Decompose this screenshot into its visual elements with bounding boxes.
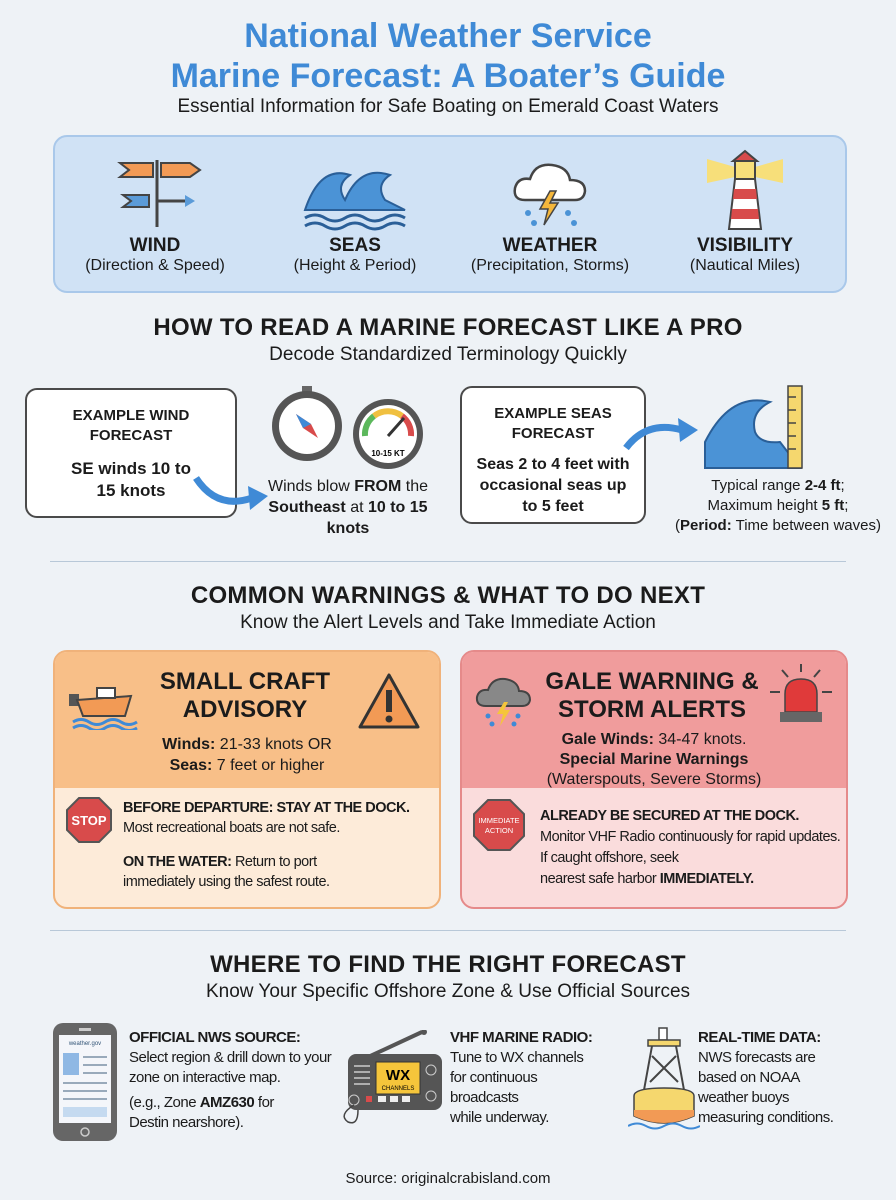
arrow: wind xyxy=(193,476,268,510)
icon: immediate action sign: IMMEDIATE xyxy=(478,816,520,825)
callout: seas forecast bubble: Seas 2 to 4 feet with occasional seas up to 5 feet xyxy=(477,456,629,515)
text: real-time data xyxy=(698,1029,833,1126)
arrow: seas xyxy=(623,418,698,450)
text: gale actions xyxy=(540,808,840,887)
heading: gale xyxy=(545,668,759,723)
icon: storm cloud xyxy=(513,164,586,226)
icon: waves xyxy=(304,172,406,230)
label: weather: (Precipitation, Storms) xyxy=(471,257,629,274)
text: VHF marine radio: while underway. xyxy=(450,1109,549,1126)
icon: immediate action sign: ACTION xyxy=(485,826,513,835)
label: visibility xyxy=(690,235,800,274)
label: wind: (Direction & Speed) xyxy=(85,257,225,274)
subheading: Know the Alert Levels and Take Immediate Action xyxy=(240,612,656,633)
text: VHF marine radio: for continuous xyxy=(450,1069,537,1086)
heading: small craft: ADVISORY xyxy=(183,696,307,723)
text: VHF marine radio: VHF MARINE RADIO: xyxy=(450,1029,592,1046)
panel: small craft advisory xyxy=(53,650,441,909)
footer: source: Source: originalcrabisland.com xyxy=(345,1170,551,1187)
text: actions xyxy=(123,800,410,890)
text: actions: BEFORE DEPARTURE: STAY AT THE DOCK. xyxy=(123,800,409,816)
icon: compass xyxy=(272,386,342,461)
text: gale actions: ALREADY BE SECURED AT THE DOCK. xyxy=(540,808,799,824)
label: weather: WEATHER xyxy=(503,235,597,256)
label: seas: (Height & Period) xyxy=(294,257,416,274)
title: Marine Forecast: A Boater’s Guide xyxy=(171,57,725,95)
text: gale actions: nearest safe harbor IMMEDIATELY. xyxy=(540,871,754,887)
callout: seas forecast bubble: EXAMPLE SEAS xyxy=(494,405,612,422)
label: wind: WIND xyxy=(130,235,180,256)
text: actions: Most recreational boats are not safe. xyxy=(123,820,340,836)
text: VHF marine radio: broadcasts xyxy=(450,1089,518,1106)
panel: forecast components xyxy=(53,135,847,293)
text: real-time data: NWS forecasts are xyxy=(698,1049,815,1066)
text: seas explanation xyxy=(675,477,881,534)
text: official nws source: (e.g., Zone AMZ630 for Destin nearshore). xyxy=(129,1094,274,1131)
text: criteria: Winds: 21-33 knots OR xyxy=(162,736,332,753)
subtitle: Essential Information for Safe Boating on Emerald Coast Waters xyxy=(177,96,719,117)
callout: wind forecast bubble: FORECAST xyxy=(90,427,172,444)
text: official nws source: Select region & drill down to your zone on interactive map. xyxy=(129,1049,331,1086)
icon: storm cloud xyxy=(476,678,531,726)
text: seas explanation: Maximum height 5 ft; xyxy=(708,497,848,514)
text: gale actions: Monitor VHF Radio continuously for rapid updates. If caught offshore, seek xyxy=(540,829,840,866)
text: real-time data: based on NOAA xyxy=(698,1069,800,1086)
text: VHF marine radio: Tune to WX channels xyxy=(450,1049,583,1066)
callout: wind forecast bubble: EXAMPLE WIND xyxy=(73,407,189,424)
callout: wind forecast bubble: SE winds 10 to xyxy=(71,459,191,478)
heading: warnings: COMMON WARNINGS & WHAT TO DO NEXT xyxy=(191,582,705,609)
text: official nws source: OFFICIAL NWS SOURCE: xyxy=(129,1029,300,1046)
label: visibility: VISIBILITY xyxy=(697,235,793,256)
icon: wave with ruler xyxy=(704,385,803,469)
label: seas xyxy=(294,235,416,274)
heading: how to read: HOW TO READ A MARINE FORECAST LIKE A PRO xyxy=(153,314,743,341)
icon: warning triangle xyxy=(358,673,420,728)
title: National Weather Service xyxy=(244,17,652,55)
text: seas explanation: (Period: Time between waves) xyxy=(675,517,881,534)
heading: gale: GALE WARNING & xyxy=(545,668,759,695)
text: real-time data: measuring conditions. xyxy=(698,1109,833,1126)
icon: VHF radio: CHANNELS xyxy=(382,1086,414,1092)
label: seas: SEAS xyxy=(329,235,381,256)
text: actions: ON THE WATER: Return to port immediately using the safest route. xyxy=(123,854,330,890)
text: seas explanation: Typical range 2-4 ft; xyxy=(711,477,845,494)
icon: VHF radio: WX xyxy=(386,1067,410,1084)
icon: wind vane xyxy=(117,160,202,227)
text: gale criteria: Gale Winds: 34-47 knots. xyxy=(562,731,746,748)
callout: seas forecast bubble xyxy=(460,386,646,524)
text: real-time data: REAL-TIME DATA: xyxy=(698,1029,821,1046)
heading: where to find: WHERE TO FIND THE RIGHT FORECAST xyxy=(210,951,686,978)
icon: siren xyxy=(770,664,832,722)
title xyxy=(171,17,725,95)
icon: lighthouse xyxy=(707,150,783,230)
icon: stop sign xyxy=(66,797,112,843)
heading: small craft xyxy=(160,668,330,723)
text: VHF marine radio xyxy=(450,1029,592,1126)
label: wind xyxy=(85,235,225,274)
text: official nws source xyxy=(129,1029,332,1131)
icon: phone xyxy=(53,1023,117,1141)
icon: stop sign: STOP xyxy=(71,813,107,828)
heading: small craft: SMALL CRAFT xyxy=(160,668,330,695)
text: wind explanation: Winds blow FROM the Southeast at 10 to 15 knots xyxy=(268,478,428,537)
icon: speed gauge xyxy=(353,399,423,469)
icon: phone: weather.gov xyxy=(68,1041,101,1047)
text: criteria: Seas: 7 feet or higher xyxy=(170,757,324,774)
text: gale criteria: Special Marine Warnings xyxy=(560,751,748,768)
icon: speed gauge: 10-15 KT xyxy=(371,449,405,458)
panel: gale warning xyxy=(460,650,848,909)
icon: buoy xyxy=(628,1027,700,1130)
heading: gale: STORM ALERTS xyxy=(558,696,746,723)
subheading: Decode Standardized Terminology Quickly xyxy=(269,344,627,365)
text: gale criteria xyxy=(547,731,761,788)
text: criteria xyxy=(162,736,332,774)
icon: VHF radio xyxy=(343,1030,442,1124)
label: visibility: (Nautical Miles) xyxy=(690,257,800,274)
callout: wind forecast bubble: 15 knots xyxy=(96,481,165,500)
callout: seas forecast bubble: FORECAST xyxy=(512,425,594,442)
icon: immediate action sign xyxy=(473,799,525,851)
label: weather xyxy=(471,235,629,274)
callout: wind forecast bubble xyxy=(25,388,237,518)
text: gale criteria: (Waterspouts, Severe Storms) xyxy=(547,771,761,788)
icon: boat xyxy=(69,687,138,730)
subheading: Know Your Specific Offshore Zone & Use Official Sources xyxy=(206,981,690,1002)
text: real-time data: weather buoys xyxy=(698,1089,789,1106)
